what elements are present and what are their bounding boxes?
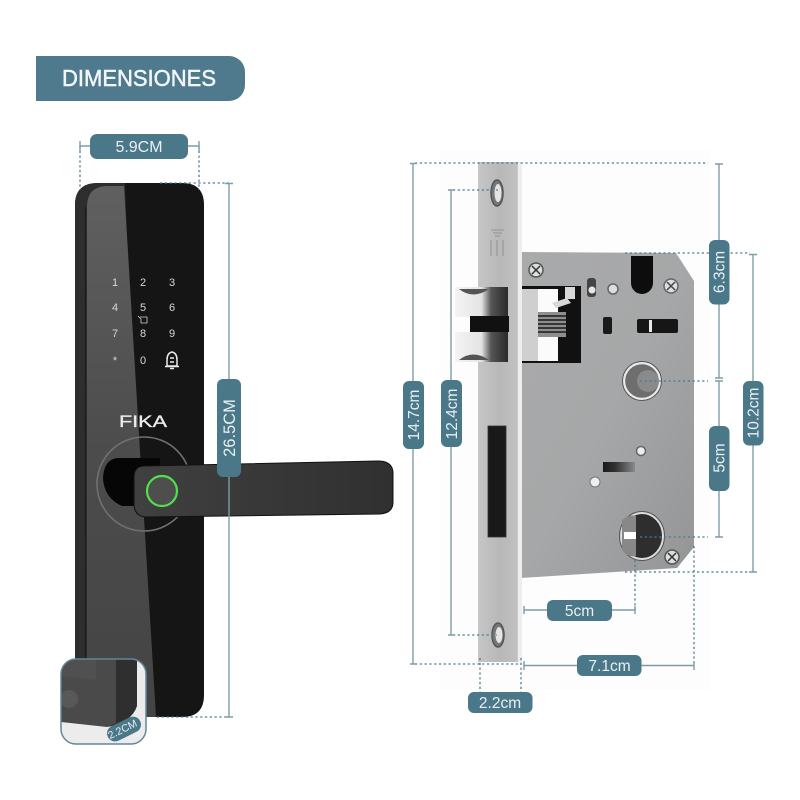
dimension: 6.3cm — [625, 164, 750, 381]
dimension: 7.1cm: 7.1cm — [588, 658, 631, 675]
dimension: lock height 26.5CM: 26.5CM — [221, 399, 239, 457]
keypad: 9 — [169, 328, 175, 340]
dimension: 7.1cm — [524, 546, 694, 676]
dimension: 5cm horizontal — [524, 560, 635, 621]
heading: DIMENSIONES — [36, 56, 245, 101]
dimension: 6.3cm: 6.3cm — [712, 251, 728, 293]
dimension: 5cm horizontal: 5cm — [565, 603, 594, 620]
lock case — [521, 252, 694, 578]
dimension: 10.2cm: 10.2cm — [746, 388, 762, 438]
dimension: 14.7cm — [403, 163, 708, 664]
screws and cut-outs — [529, 256, 679, 564]
keypad: 1 — [112, 277, 118, 289]
dimension: 2.2cm: 2.2cm — [479, 695, 521, 712]
top mounting hole — [491, 180, 503, 206]
keypad: 4 — [112, 302, 118, 314]
strike slot — [488, 426, 506, 537]
dimension: 5cm vertical: 5cm — [712, 443, 728, 473]
inset: lock thickness 2.2CM: 2.2CM — [106, 718, 139, 742]
engraved logo — [491, 230, 504, 256]
inset: lock thickness 2.2CM — [60, 659, 146, 744]
fingerprint sensor — [147, 476, 177, 506]
dimension: lock width 5.9CM: 5.9CM — [115, 139, 163, 156]
faceplate — [478, 162, 522, 662]
keypad: 6 — [169, 302, 175, 314]
latch window — [521, 286, 581, 363]
keypad: 7 — [112, 328, 118, 340]
keypad: 5 — [140, 302, 146, 314]
dimension: 10.2cm — [625, 254, 764, 572]
dimension: lock width 5.9CM — [80, 134, 199, 190]
keypad: * — [113, 355, 118, 367]
heading: DIMENSIONES: DIMENSIONES — [62, 65, 216, 91]
faint image backdrop — [440, 150, 710, 690]
latch bolt — [455, 287, 509, 362]
handle base ring — [97, 437, 191, 531]
keypad: 8 — [140, 328, 146, 340]
keypad: 3 — [169, 277, 175, 289]
icon: bell — [165, 352, 179, 368]
lock front panel — [75, 183, 204, 717]
dimension: 14.7cm: 14.7cm — [406, 390, 423, 440]
keypad — [112, 277, 179, 368]
smart lock product image — [75, 183, 393, 717]
keypad: 0 — [140, 355, 146, 367]
handle lever — [134, 461, 393, 517]
dimension: lock height 26.5CM — [157, 183, 241, 717]
dimension: 12.4cm — [441, 190, 498, 635]
brand: FIKA: FIKA — [119, 413, 167, 431]
handle shank — [103, 458, 160, 506]
dimension: 5cm vertical — [640, 381, 730, 537]
keypad: 2 — [140, 277, 146, 289]
mortise lock image — [455, 162, 694, 662]
bottom mounting hole — [492, 623, 504, 647]
dimension: 12.4cm: 12.4cm — [444, 389, 461, 439]
icon: battery — [138, 316, 147, 323]
dimension: 2.2cm — [468, 658, 532, 713]
